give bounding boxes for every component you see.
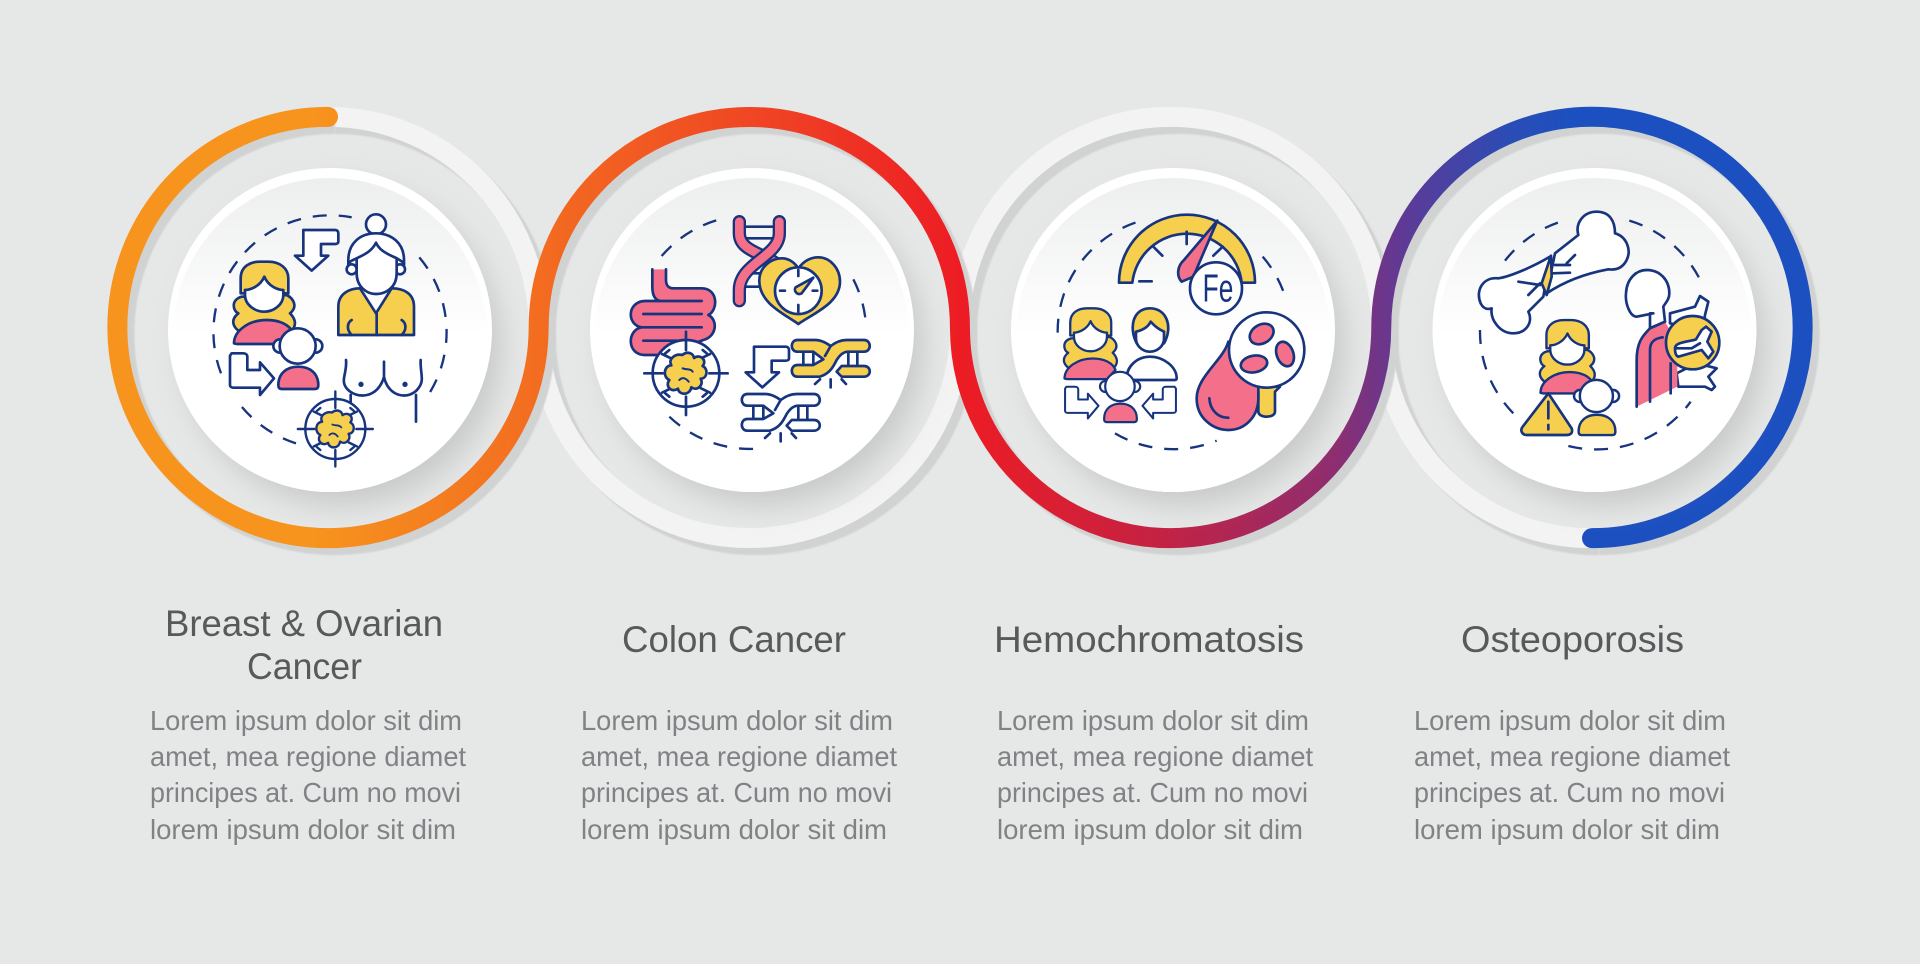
panel: colon cancer — [581, 168, 924, 845]
gradient wave ribbon — [117, 117, 1803, 538]
icon: bone fracture and family — [1479, 212, 1719, 449]
disc 4 — [1432, 168, 1766, 506]
body text 4 — [1414, 705, 1730, 845]
body text 3: amet, mea regione diamet — [997, 741, 1313, 772]
body text 1: principes at. Cum no movi — [150, 777, 461, 808]
body text 1 — [150, 705, 466, 845]
body text 2: amet, mea regione diamet — [581, 741, 897, 772]
heading: osteoporosis: Osteoporosis — [1461, 619, 1684, 660]
body text 1: amet, mea regione diamet — [150, 741, 466, 772]
panel: osteoporosis — [1414, 168, 1766, 845]
disc 2 — [590, 168, 924, 506]
body text 1: Lorem ipsum dolor sit dim — [150, 705, 462, 736]
disc 3 — [1011, 168, 1345, 506]
panel: breast and ovarian cancer — [150, 168, 502, 845]
panel: hemochromatosis — [994, 168, 1345, 845]
body text 4: lorem ipsum dolor sit dim — [1414, 814, 1720, 845]
heading: breast and ovarian cancer: Breast & Ovarian — [165, 603, 443, 644]
pale ring segments with hard shadow — [328, 117, 1599, 545]
gradient wave ribbon shadow — [124, 124, 1810, 545]
disc 1 — [168, 168, 502, 506]
body text 4: amet, mea regione diamet — [1414, 741, 1730, 772]
body text 4: principes at. Cum no movi — [1414, 777, 1725, 808]
heading: breast and ovarian cancer: Cancer — [247, 646, 362, 687]
heading: hemochromatosis: Hemochromatosis — [994, 619, 1304, 660]
body text 2 — [581, 705, 897, 845]
icon: colon cancer genetics — [631, 219, 870, 449]
body text 2: principes at. Cum no movi — [581, 777, 892, 808]
body text 3 — [997, 705, 1313, 845]
body text 3: principes at. Cum no movi — [997, 777, 1308, 808]
body text 2: Lorem ipsum dolor sit dim — [581, 705, 893, 736]
heading: colon cancer: Colon Cancer — [622, 619, 846, 660]
body text 3: lorem ipsum dolor sit dim — [997, 814, 1303, 845]
heading: breast and ovarian cancer — [165, 603, 443, 687]
icon: iron overload family — [1058, 215, 1304, 449]
body text 3: Lorem ipsum dolor sit dim — [997, 705, 1309, 736]
icon: iron overload family: Fe — [1203, 267, 1233, 310]
body text 1: lorem ipsum dolor sit dim — [150, 814, 456, 845]
body text 4: Lorem ipsum dolor sit dim — [1414, 705, 1726, 736]
body text 2: lorem ipsum dolor sit dim — [581, 814, 887, 845]
icon: hereditary breast cancer — [213, 214, 447, 466]
